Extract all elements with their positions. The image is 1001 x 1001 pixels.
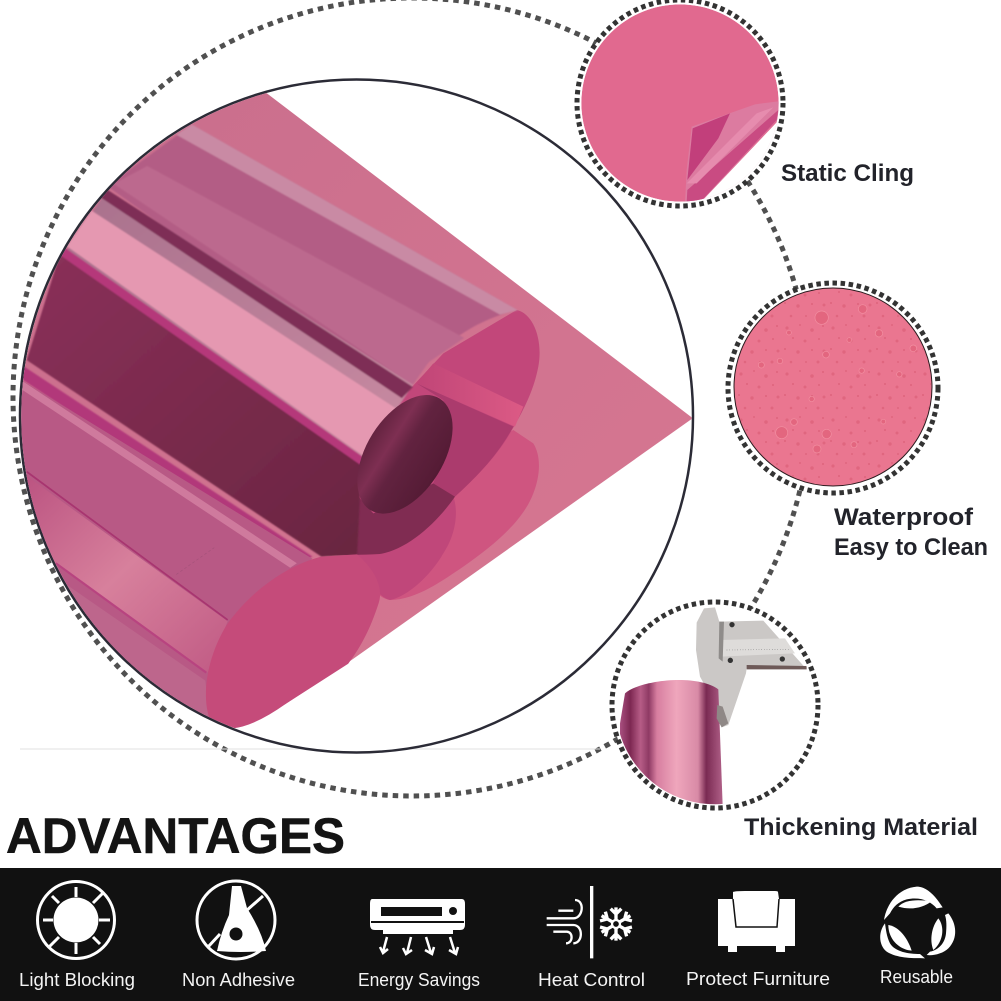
label: static cling: Static Cling (781, 160, 914, 187)
circle: static cling (577, 0, 790, 217)
baseline rule (20, 748, 600, 750)
label: light blocking: Light Blocking (19, 970, 135, 990)
label: heat control: Heat Control (538, 970, 645, 990)
lower roll (21, 381, 312, 717)
icon: heat and cold (547, 886, 633, 958)
large dotted ring (13, 0, 811, 796)
label: thickening material: Thickening Material (744, 814, 978, 841)
icon: armchair (718, 891, 795, 952)
icon: non adhesive (197, 881, 275, 959)
film cylinder (620, 680, 723, 805)
label: non adhesive: Non Adhesive (182, 970, 295, 990)
upper roll bands (13, 124, 518, 563)
caliper (696, 607, 807, 727)
roll hole (358, 395, 453, 514)
circle: thickness caliper (612, 602, 818, 808)
icon: light blocking (38, 882, 114, 958)
heading: ADVANTAGES (6, 808, 345, 864)
icon: recycling leaves (880, 887, 955, 958)
label: energy savings: Energy Savings (358, 970, 480, 990)
circle: water droplets (728, 283, 938, 493)
label: easy to clean: Easy to Clean (834, 534, 988, 561)
roll end caps (336, 310, 540, 600)
advantages bar (0, 868, 1001, 1001)
label: waterproof: Waterproof (834, 504, 974, 531)
main circle: rolled pink film (0, 70, 693, 752)
label: reusable: Reusable (880, 967, 953, 987)
label: protect furniture: Protect Furniture (686, 969, 830, 989)
icon: air conditioner (370, 899, 465, 954)
front end of lower roll (206, 554, 380, 728)
